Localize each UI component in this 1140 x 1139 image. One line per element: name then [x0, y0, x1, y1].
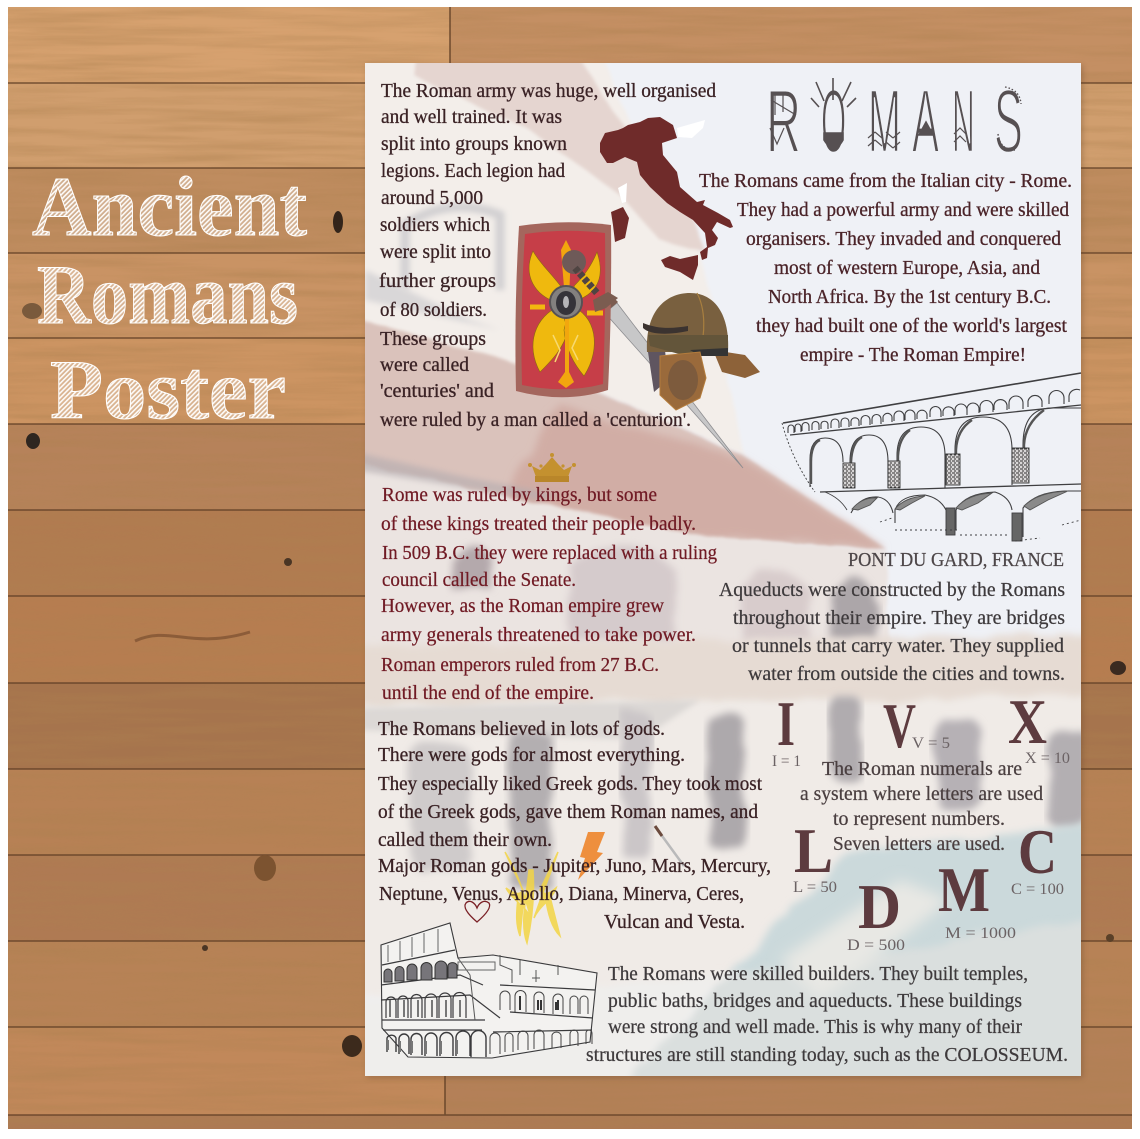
text block: aqueducts: throughout their empire. They are bridges: [733, 607, 1065, 629]
numeral values: V = 5: [912, 735, 950, 752]
numeral values: L = 50: [793, 879, 837, 896]
text block: army: were called: [380, 354, 469, 376]
text block: gods: The Romans believed in lots of gods.: [378, 718, 665, 740]
numeral values: M = 1000: [945, 925, 1016, 942]
text block: army: of 80 soldiers.: [380, 299, 487, 321]
heading: ROMANS: O: [821, 72, 846, 172]
icon: map of Italy: [600, 117, 733, 280]
numeral values: C = 100: [1011, 881, 1064, 898]
text block: introduction: They had a powerful army and were skilled: [737, 199, 1069, 221]
text block: gods: Major Roman gods - Jupiter, Juno, Mars, Mercury,: [378, 855, 771, 877]
icon: red Roman shield: [515, 222, 618, 397]
text block: builders: structures are still standing today, such as the COLOSSEUM.: [586, 1044, 1068, 1066]
text block: gods: Vulcan and Vesta.: [604, 911, 745, 933]
numeral letters: V: [883, 690, 916, 761]
numeral letters: D: [858, 871, 901, 942]
text block: gods: of the Greek gods, gave them Roman names, and: [378, 801, 758, 823]
text block: army: soldiers which: [380, 214, 490, 236]
text block: gods: They especially liked Greek gods. They took most: [378, 773, 762, 795]
text block: introduction: organisers. They invaded and conquered: [746, 228, 1061, 250]
text block: army: were ruled by a man called a 'centurion'.: [380, 409, 691, 431]
text block: army: around 5,000: [381, 187, 483, 209]
numeral letters: X: [1008, 686, 1047, 757]
text block: aqueducts: Aqueducts were constructed by the Romans: [719, 579, 1065, 601]
text block: aqueducts: water from outside the cities and towns.: [748, 663, 1065, 685]
heading: ROMANS: M: [868, 70, 901, 171]
text block: aqueducts: [719, 549, 1065, 685]
heading: ROMANS: [766, 70, 1023, 172]
text block: introduction: The Romans came from the Italian city - Rome.: [699, 170, 1072, 192]
numeral letters: M: [938, 854, 990, 925]
numeral values: D = 500: [847, 937, 905, 954]
text block: introduction: [699, 170, 1072, 366]
numeral letters: L: [794, 815, 833, 886]
numeral letters: [777, 686, 1057, 942]
side title: Ancient Romans Poster: Poster: [50, 343, 286, 437]
numeral letters: C: [1018, 816, 1057, 887]
numeral values: [772, 735, 1070, 954]
panel: Roman numerals: [772, 686, 1070, 954]
illustration: Colosseum: [381, 923, 597, 1058]
numerals explanation: a system where letters are used: [800, 783, 1043, 805]
heading: ROMANS: N: [952, 72, 975, 172]
icons: sun of Apollo, lightning, sword, heart: [465, 826, 684, 943]
text block: army: further groups: [379, 270, 496, 292]
text block: introduction: they had built one of the world's largest: [756, 315, 1067, 337]
icon: Roman sword: [562, 250, 743, 468]
text block: army: and well trained. It was: [381, 106, 562, 128]
text block: builders: [586, 963, 1068, 1066]
text block: kings and emperors: until the end of the empire.: [382, 682, 594, 704]
text block: army: [379, 80, 716, 431]
text block: army: 'centuries' and: [380, 380, 494, 402]
icon: gold crown: [528, 453, 576, 482]
illustration: Pont du Gard aqueduct: [782, 373, 1081, 541]
text block: kings and emperors: In 509 B.C. they were replaced with a ruling: [382, 542, 717, 564]
text block: builders: The Romans were skilled builders. They built temples,: [608, 963, 1028, 985]
text block: introduction: most of western Europe, Asia, and: [774, 257, 1040, 279]
text block: gods: called them their own.: [378, 829, 552, 851]
text block: kings and emperors: Roman emperors ruled from 27 B.C.: [381, 654, 659, 676]
text block: kings and emperors: army generals threatened to take power.: [381, 624, 696, 646]
numeral values: I = 1: [772, 753, 801, 770]
text block: army: legions. Each legion had: [381, 160, 565, 182]
text block: gods: [378, 718, 771, 933]
text block: builders: public baths, bridges and aqueducts. These buildings: [608, 990, 1022, 1012]
numerals explanation: Seven letters are used.: [833, 833, 1005, 855]
text block: army: split into groups known: [381, 133, 567, 155]
side title: Ancient Romans Poster: Romans: [37, 248, 298, 342]
heading: ROMANS: A: [912, 71, 939, 171]
text block: kings and emperors: council called the Senate.: [382, 569, 576, 591]
text block: army: The Roman army was huge, well organised: [381, 80, 716, 102]
text block: army: These groups: [380, 328, 486, 350]
text block: builders: were strong and well made. This is why many of their: [608, 1016, 1022, 1038]
text block: gods: Neptune, Venus, Apollo, Diana, Minerva, Ceres,: [379, 883, 744, 905]
text block: army: were split into: [380, 241, 491, 263]
text block: gods: There were gods for almost everything.: [378, 744, 685, 766]
side title: Ancient Romans Poster: Ancient: [32, 160, 307, 254]
numerals explanation: [800, 758, 1043, 855]
text block: kings and emperors: However, as the Roman empire grew: [381, 595, 665, 617]
text block: aqueducts: or tunnels that carry water. They supplied: [732, 635, 1064, 657]
title ornaments: [770, 78, 1021, 150]
icon: legionary helmet: [643, 293, 760, 410]
side title: Ancient Romans Poster: [32, 160, 307, 437]
numeral values: X = 10: [1025, 750, 1070, 767]
text block: kings and emperors: of these kings treated their people badly.: [381, 513, 696, 535]
numeral letters: I: [777, 688, 795, 759]
heading: ROMANS: S: [994, 70, 1023, 171]
text block: introduction: empire - The Roman Empire!: [800, 344, 1026, 366]
numerals explanation: The Roman numerals are: [822, 758, 1022, 780]
numerals explanation: to represent numbers.: [833, 808, 1005, 830]
panel: poster sheet: [350, 50, 1090, 1085]
watercolour background wash: [350, 50, 1090, 1085]
text block: kings and emperors: [381, 484, 717, 704]
text block: aqueducts: PONT DU GARD, FRANCE: [848, 549, 1064, 571]
text block: introduction: North Africa. By the 1st century B.C.: [768, 286, 1051, 308]
heading: ROMANS: R: [766, 72, 801, 172]
text block: kings and emperors: Rome was ruled by kings, but some: [382, 484, 657, 506]
